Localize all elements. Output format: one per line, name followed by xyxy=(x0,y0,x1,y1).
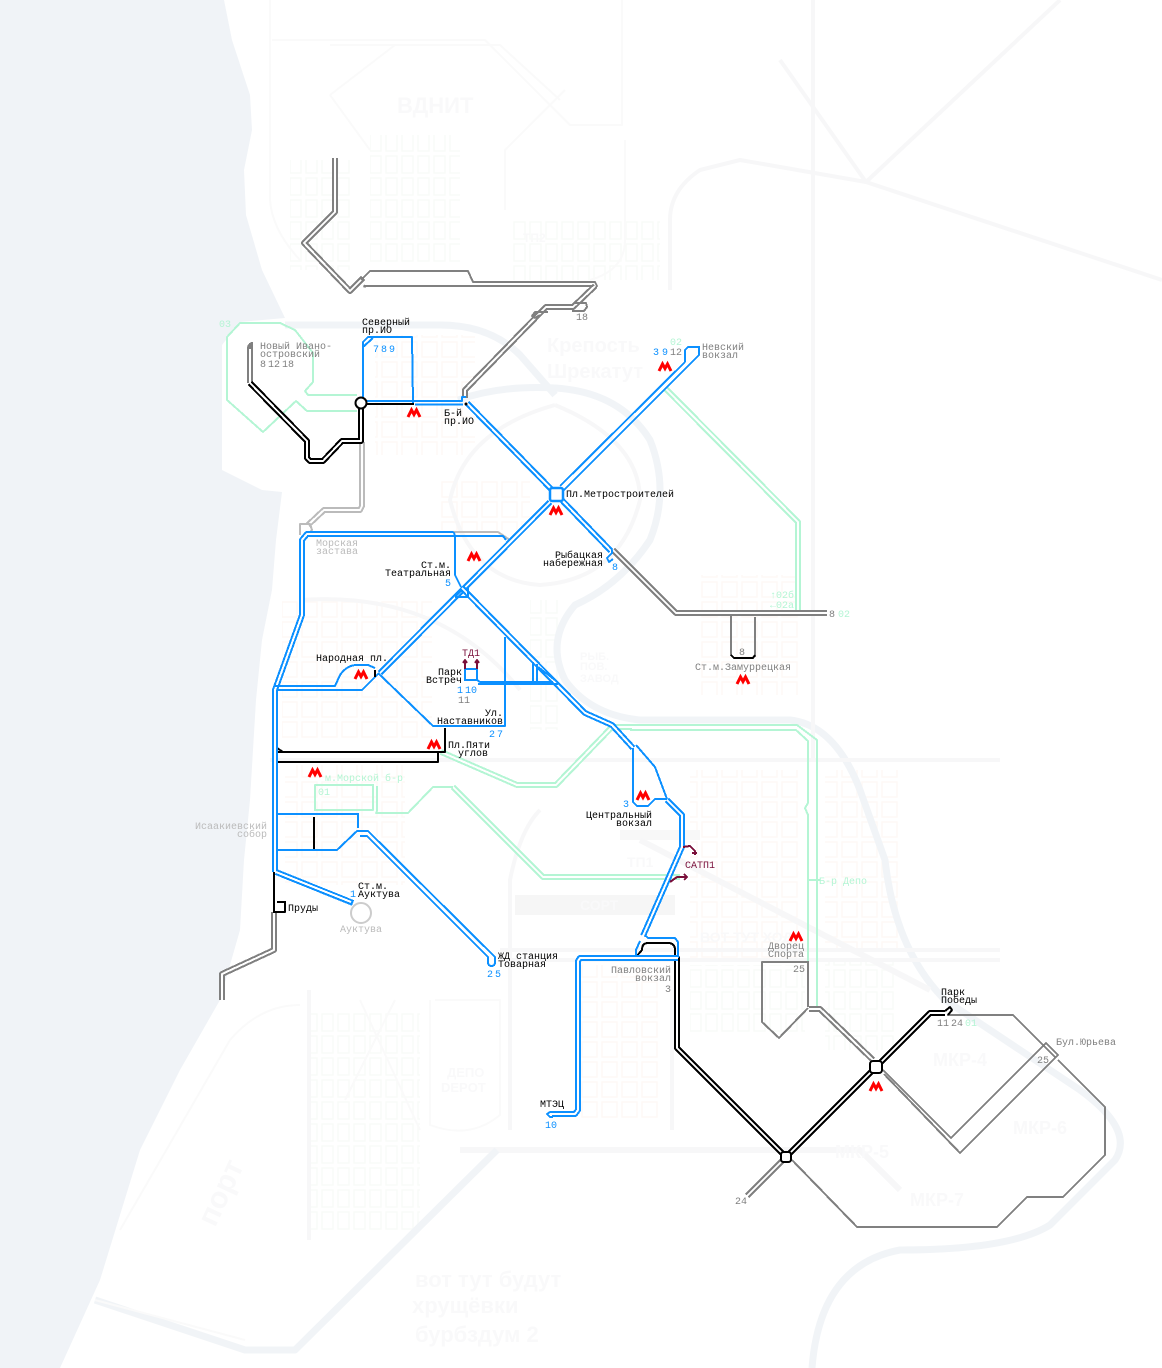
station labels: Театральная xyxy=(385,569,451,580)
blue route: Northern Ivanovsky loop xyxy=(363,337,466,404)
station labels: Центральный xyxy=(586,810,652,822)
station labels: 02 xyxy=(670,338,682,349)
station labels xyxy=(195,313,1116,1208)
station labels: 3 xyxy=(653,348,659,359)
station labels: 25 xyxy=(1037,1056,1049,1067)
station labels: Ул. xyxy=(485,709,503,720)
background: faint district names: порт xyxy=(191,1154,251,1231)
station labels: Пл.Пяти xyxy=(448,741,490,752)
station labels: ТД1 xyxy=(462,649,480,660)
background: faint district names: МКР-4 xyxy=(933,1050,987,1070)
station labels: ↑02б xyxy=(770,589,794,602)
grey route: Rybatskaya to east xyxy=(613,550,827,657)
station labels: 18 xyxy=(282,360,294,371)
station labels: Парк xyxy=(941,988,965,999)
station labels: Спорта xyxy=(768,950,804,961)
station labels: Новый Ивано- xyxy=(260,341,332,353)
background: faint district names: ТП1 xyxy=(627,854,654,870)
background: faint district names xyxy=(191,93,1067,1347)
black route: Pavlovsky to Park Pobedy xyxy=(636,943,952,1157)
station labels: 03 xyxy=(219,320,231,331)
station labels: вокзал xyxy=(635,974,671,985)
station labels: 11 xyxy=(937,1019,949,1030)
station labels: 01 xyxy=(318,788,330,799)
water: sea along the west coast xyxy=(0,0,285,1368)
light grey route: Morskaya Zastava xyxy=(300,442,510,923)
grey route: south-east microdistrict loop xyxy=(747,1015,1105,1227)
station labels: углов xyxy=(458,749,488,760)
background: faint district names: ТП2 xyxy=(523,231,546,245)
mint route: Novy Ivanovsky loop xyxy=(227,323,357,432)
station labels: Дворец xyxy=(768,942,804,953)
background: faint district names: СОРТ xyxy=(580,897,619,913)
mint route: Morskoy boulevard and south xyxy=(315,785,820,880)
station labels: 02 xyxy=(838,610,850,621)
station labels: Б-й xyxy=(444,408,462,420)
station labels: 24 xyxy=(735,1197,747,1208)
station labels: 18 xyxy=(576,313,588,324)
grey route: south-west from Auktuva xyxy=(222,912,274,1000)
grey route: Sport Palace loop xyxy=(762,962,873,1060)
station labels: 1 xyxy=(350,890,356,901)
station labels: Северный xyxy=(362,317,410,329)
background: faint district names: бурбздум 2 xyxy=(415,1322,539,1347)
grey route: Novy Ivanovsky terminal xyxy=(250,345,253,383)
background: faint district names: DEPOT xyxy=(441,1080,486,1095)
station labels: Пл.Метростроителей xyxy=(566,489,674,501)
background: faint district names: ПОВ. xyxy=(580,661,607,673)
station labels: ←02а xyxy=(770,601,794,612)
background: faint district names: РЫБ. xyxy=(580,651,609,663)
blue route: Central to Pavlovsky xyxy=(636,800,682,958)
station labels: Ст.м.Замуррецкая xyxy=(695,663,791,674)
black route: Prudy terminal xyxy=(274,872,285,912)
station labels: ЖД станция xyxy=(498,952,558,963)
station labels: МТЭЦ xyxy=(540,1100,564,1111)
mint route: central double line xyxy=(441,725,817,1008)
station labels: 27 xyxy=(489,730,505,741)
station labels: Пруды xyxy=(288,904,318,915)
black stub: Central boulevard block xyxy=(313,817,315,850)
background: faint district names: Крепость xyxy=(547,335,640,357)
station labels: 8 xyxy=(260,360,266,371)
station labels: 3 xyxy=(623,800,629,811)
black line: Bolshoy prospect xyxy=(365,403,414,405)
blue route: crossing to Central station xyxy=(455,588,667,806)
station labels: пр.ИО xyxy=(362,326,392,337)
station labels: Наставников xyxy=(437,717,503,728)
mint route: Nevsky to east xyxy=(665,388,798,613)
station labels: Исаакиевский xyxy=(195,821,267,833)
station labels: Б-р Депо xyxy=(819,877,867,888)
station labels: островский xyxy=(260,349,320,361)
station labels: 3 xyxy=(665,985,671,996)
interchange nodes xyxy=(356,398,882,1162)
station labels: 1 xyxy=(457,686,463,697)
station labels: 789 xyxy=(373,345,397,356)
grey route: north loop xyxy=(304,158,597,398)
blue route: Narodnaya square xyxy=(275,637,505,726)
blue route: Park Vstrech xyxy=(465,662,558,684)
maroon depot arrows xyxy=(463,660,697,882)
station labels: Победы xyxy=(941,994,977,1007)
station labels: 8 xyxy=(739,648,745,659)
station labels: м.Морской б-р xyxy=(325,772,403,785)
station labels: САТП1 xyxy=(685,861,715,872)
station labels: Товарная xyxy=(498,960,546,971)
station labels: 11 xyxy=(458,696,470,707)
station labels: собор xyxy=(237,828,267,841)
station labels: застава xyxy=(316,547,358,558)
blue route: Auktuva xyxy=(276,872,353,903)
station labels: вокзал xyxy=(616,819,652,830)
background: faint district names: ВДНИТ xyxy=(397,93,474,118)
background: faint city blocks xyxy=(282,135,900,1230)
station labels: Парк xyxy=(438,668,462,679)
background: faint district names: МКР-7 xyxy=(910,1190,964,1210)
station labels: 25 xyxy=(793,965,805,976)
background: faint district names: вот тут будут xyxy=(415,1267,561,1292)
background: faint district names: МКР-6 xyxy=(1013,1118,1067,1138)
black loop: Pyati uglov xyxy=(274,728,445,762)
station labels: Невский xyxy=(702,342,744,354)
station labels: Ст.м. xyxy=(358,882,388,893)
blue route: north-west diagonal xyxy=(467,403,613,562)
blue route: Pavlovsky to MTETs xyxy=(547,958,678,1117)
background: faint district names: ЗАВОД xyxy=(580,673,619,685)
station labels: пр.ИО xyxy=(444,417,474,428)
station labels: 5 xyxy=(445,579,451,590)
black connector: Zamurretskaya xyxy=(731,655,755,658)
blue route: Metrostroiteley to Nevsky xyxy=(560,347,699,491)
station labels: 8 xyxy=(829,610,835,621)
background: faint district names: хрущёвки xyxy=(412,1293,518,1318)
station labels: 12 xyxy=(268,360,280,371)
blue route: square block and Tovarnaya xyxy=(276,814,495,966)
station labels: Рыбацкая xyxy=(555,549,603,562)
black route: Novy Ivanovsky xyxy=(250,383,361,461)
station labels: Бул.Юрьева xyxy=(1056,1038,1116,1049)
station labels: Ст.м. xyxy=(421,561,451,572)
station labels: вокзал xyxy=(702,351,738,362)
blue route: west main line xyxy=(275,532,506,872)
background: faint district names: ВОТ ТУТ ХОД xyxy=(700,929,792,945)
station labels: Ауктува xyxy=(340,925,382,936)
station labels: 24 xyxy=(951,1019,963,1030)
station labels: Ауктува xyxy=(358,890,400,901)
metro icons xyxy=(309,364,882,1091)
station labels: Павловский xyxy=(611,965,671,977)
background: faint district names: Шрекатут xyxy=(547,361,643,383)
station labels: 12 xyxy=(670,348,682,359)
station labels: 8 xyxy=(612,563,618,574)
background: faint district names: МКР-5 xyxy=(835,1142,889,1162)
station labels: Морская xyxy=(316,539,358,550)
station labels: 10 xyxy=(465,686,477,697)
station labels: 01 xyxy=(965,1019,977,1030)
blue route: south-west diagonal xyxy=(380,502,550,673)
station labels: набережная xyxy=(543,557,603,570)
station labels: 10 xyxy=(545,1121,557,1132)
station labels: 25 xyxy=(487,970,503,981)
station labels: Народная пл. xyxy=(316,654,388,665)
station labels: 9 xyxy=(662,348,668,359)
background: faint district names: ДЕПО xyxy=(447,1065,484,1080)
station labels: Встреч xyxy=(426,676,462,687)
